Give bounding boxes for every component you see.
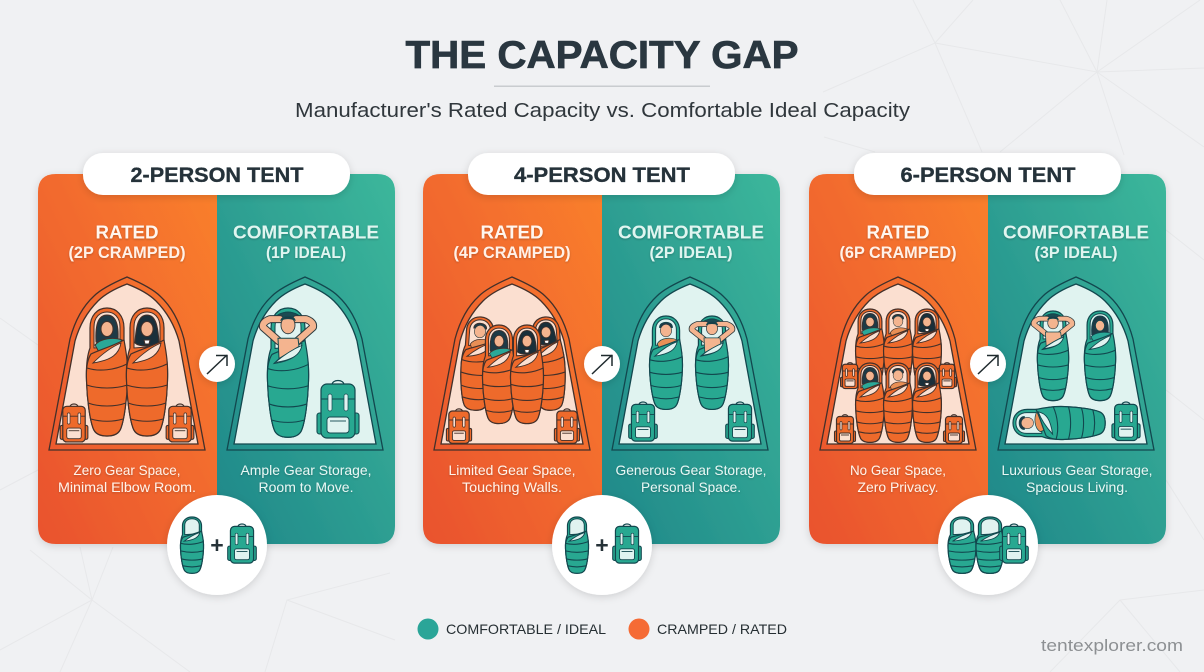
panel background	[809, 174, 1166, 544]
panel: 2-person tent	[38, 153, 395, 595]
heading pill	[83, 153, 350, 195]
arrow icon	[970, 346, 1006, 382]
rated heading	[68, 222, 186, 262]
comfortable description: Ample Gear Storage,	[240, 462, 372, 478]
rated tent illustration	[820, 277, 976, 450]
rated heading: (2P CRAMPED)	[68, 244, 186, 262]
rated heading: (4P CRAMPED)	[454, 244, 570, 262]
rated heading: RATED	[96, 222, 158, 242]
watermark: tentexplorer.com	[1041, 636, 1183, 655]
comfortable description: Personal Space.	[641, 479, 741, 495]
panel: 4-person tent	[423, 153, 780, 595]
comfortable description: Luxurious Gear Storage,	[1002, 462, 1152, 478]
ideal capacity badge	[938, 495, 1038, 595]
comfortable heading: (1P IDEAL)	[266, 244, 346, 262]
heading pill: 6-PERSON TENT	[900, 163, 1076, 187]
panel background	[38, 174, 395, 544]
rated tent illustration	[434, 277, 590, 450]
rated heading	[840, 222, 956, 262]
comfortable description	[1002, 462, 1152, 495]
rated description: Zero Privacy.	[858, 479, 938, 495]
rated tent illustration	[49, 277, 205, 450]
comfortable description	[240, 462, 372, 495]
comfortable heading	[618, 222, 764, 262]
ideal capacity badge: +	[595, 532, 609, 558]
rated description	[448, 462, 576, 495]
heading pill	[468, 153, 735, 195]
panel background	[423, 174, 780, 544]
rated description	[850, 462, 946, 495]
rated description	[58, 462, 196, 495]
rated heading: (6P CRAMPED)	[840, 244, 956, 262]
heading pill	[854, 153, 1121, 195]
rated description: No Gear Space,	[850, 462, 946, 478]
title: THE CAPACITY GAP	[406, 34, 798, 77]
heading pill: 2-PERSON TENT	[130, 163, 304, 187]
comfortable heading: COMFORTABLE	[1003, 222, 1149, 242]
ideal capacity badge	[552, 495, 652, 595]
rated description: Minimal Elbow Room.	[58, 479, 196, 495]
comfortable heading: (3P IDEAL)	[1034, 244, 1118, 262]
legend	[418, 618, 787, 640]
comfortable heading: COMFORTABLE	[618, 222, 764, 242]
comfortable heading	[233, 222, 379, 262]
comfortable heading: (2P IDEAL)	[650, 244, 732, 262]
comfortable description: Spacious Living.	[1026, 479, 1128, 495]
ideal capacity badge: +	[210, 532, 224, 558]
rated heading: RATED	[866, 222, 930, 242]
arrow icon	[199, 346, 235, 382]
rated description: Zero Gear Space,	[74, 462, 180, 478]
comfortable heading	[1003, 222, 1149, 262]
rated description: Limited Gear Space,	[448, 462, 576, 478]
heading pill: 4-PERSON TENT	[514, 163, 690, 187]
comfortable description: Generous Gear Storage,	[616, 462, 766, 478]
comfortable tent illustration	[998, 277, 1154, 450]
title divider	[494, 86, 710, 87]
legend: cramped: CRAMPED / RATED	[657, 621, 787, 637]
arrow icon	[584, 346, 620, 382]
comfortable heading: COMFORTABLE	[233, 222, 379, 242]
comfortable tent illustration	[612, 277, 768, 450]
ideal capacity badge	[167, 495, 267, 595]
legend: comfortable: COMFORTABLE / IDEAL	[446, 621, 606, 637]
panel: 6-person tent	[809, 153, 1166, 595]
legend: cramped	[628, 618, 787, 640]
subtitle: Manufacturer's Rated Capacity vs. Comfortable Ideal Capacity	[295, 100, 910, 122]
rated heading: RATED	[480, 222, 544, 242]
comfortable tent illustration	[227, 277, 383, 450]
comfortable description: Room to Move.	[258, 479, 354, 495]
rated heading	[454, 222, 570, 262]
rated description: Touching Walls.	[462, 479, 562, 495]
comfortable description	[616, 462, 766, 495]
legend: comfortable	[418, 618, 606, 640]
